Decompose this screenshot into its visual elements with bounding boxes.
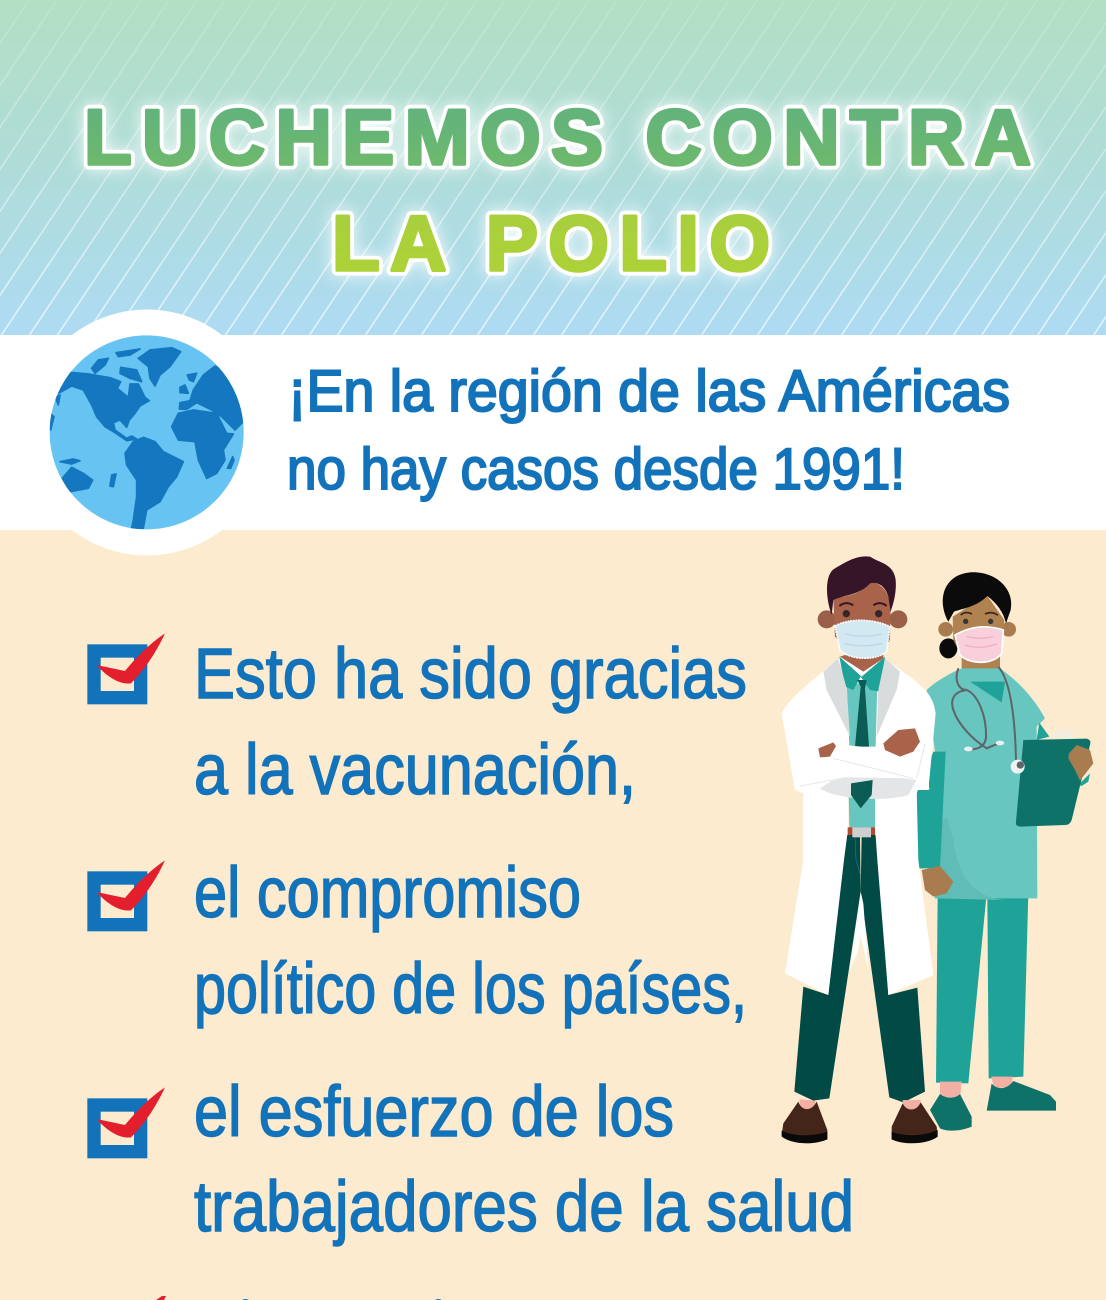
list item: vacunación: Esto ha sido gracias [194,635,747,714]
icon: globe [50,310,244,556]
list item: trabajadores de la salud [94,1073,854,1247]
figure: nurse [917,572,1093,1131]
icon: checkbox [94,1087,165,1152]
title: LA POLIO [332,199,770,287]
title: LUCHEMOS CONTRA [84,93,1031,181]
list item: compromiso político [94,854,747,1029]
title [84,93,1031,287]
figure: doctor [782,556,938,1143]
icon: checkbox [94,633,165,698]
text: banner statement: no hay casos desde 1991! [287,437,905,502]
text: banner statement [287,359,1010,502]
title: LA POLIO [332,199,770,287]
list item: trabajadores de la salud: trabajadores de la salud [194,1168,854,1247]
icon: checkbox [94,860,165,925]
list item: compromiso político: político de los países, [194,950,747,1029]
list item: cropped fourth item [156,1296,442,1300]
list item: vacunación [94,633,747,810]
list item: trabajadores de la salud: el esfuerzo de los [194,1073,674,1152]
list item: compromiso político: el compromiso [194,854,581,933]
panel: cream background [0,530,1106,1300]
text: banner statement: ¡En la región de las Américas [288,359,1010,424]
panel: white banner [0,335,1106,530]
panel: header background [0,0,1106,335]
list item: vacunación: a la vacunación, [194,731,636,810]
title: LUCHEMOS CONTRA [84,93,1031,181]
illustration: health workers [782,556,1093,1143]
